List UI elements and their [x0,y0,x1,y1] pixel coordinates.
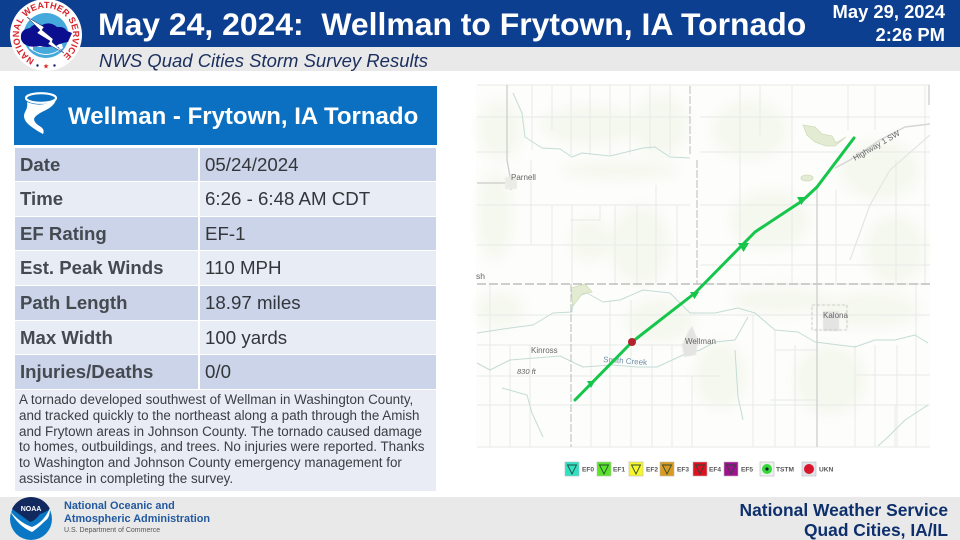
icon: tornado [24,92,58,134]
panel: tornado facts [14,86,437,491]
description text: A tornado developed southwest of Wellman in Washington County, and tracked quickly to the northeast along a path through the Amish and Frytown areas in Johnson County. The tornado caused damage to homes, outbuildings, and trees. No injuries were reported. Thanks to Washington and Johnson County emergency management for assistance in completing the survey. [19,392,424,486]
row: time: 6:26 - 6:48 AM CDT [205,188,370,209]
rivers [477,93,928,446]
row: injuries and deaths [15,355,436,389]
row: date: 05/24/2024 [205,154,299,174]
icon: National Weather Service logo: ★ [43,62,49,70]
map labels: Wellman [685,337,716,346]
map legend: UKN [819,466,834,474]
tornado start marker [628,338,636,346]
header band [0,0,960,47]
row: max width: 100 yards [205,326,287,348]
green patches [571,125,846,306]
map labels: 830 ft [517,367,537,376]
title: May 24, 2024: Wellman to Frytown, IA Tornado [98,6,806,42]
map labels [476,128,902,376]
row: EF rating [15,217,436,250]
footer office name: National Weather Service Quad Cities, IA/IL [740,500,948,540]
map legend: EF1 [613,466,625,474]
row: date: Date [20,154,60,174]
row: peak winds [15,251,436,285]
row: date [15,148,436,181]
row: injuries and deaths: 0/0 [205,361,231,382]
map legend: EF2 [646,466,658,474]
map legend: TSTM [776,466,794,474]
row: peak winds: 110 MPH [205,257,282,278]
row: peak winds: Est. Peak Winds [20,257,163,278]
row: path length: 18.97 miles [205,292,301,313]
county lines and highways [477,85,930,447]
tornado track line [575,138,854,400]
map legend: EF5 [741,466,753,474]
row: EF rating: EF Rating [20,222,107,244]
row: injuries and deaths: Injuries/Deaths [20,361,153,382]
map labels: Parnell [511,173,536,182]
map labels: Kalona [823,311,848,320]
icon: NOAA logo [10,497,52,540]
heading text: Wellman - Frytown, IA Tornado [68,103,418,130]
NOAA name: National Oceanic and Atmospheric Administration [64,500,210,525]
town areas [505,177,847,357]
panel heading [14,86,437,145]
subtitle: NWS Quad Cities Storm Survey Results [99,50,428,71]
track direction markers [587,197,806,388]
row: path length: Path Length [20,292,127,313]
map labels: Highway 1 SW [852,128,902,163]
row: path length [15,286,436,320]
map labels: Smith Creek [603,355,648,367]
date and time stamp: May 29, 2024 2:26 PM [833,1,945,45]
map legend: EF4 [709,466,721,474]
row: max width [15,321,436,354]
footer band [0,497,960,540]
subtitle band [0,47,960,71]
row: EF rating: EF-1 [205,222,246,244]
road and section grid [477,85,930,447]
row: max width: Max Width [20,326,113,348]
icon: National Weather Service logo: NATIONAL WEATHER SERVICE [12,2,80,65]
map labels: Kinross [531,346,558,355]
row: time: Time [20,188,63,209]
map legend: EF3 [677,466,689,474]
row: time [15,182,436,216]
icon: NOAA logo: NOAA [21,506,41,513]
NOAA department line: U.S. Department of Commerce [64,527,160,534]
map legend: EF0 [582,466,594,474]
map labels: sh [476,271,485,281]
map legend [565,462,834,476]
